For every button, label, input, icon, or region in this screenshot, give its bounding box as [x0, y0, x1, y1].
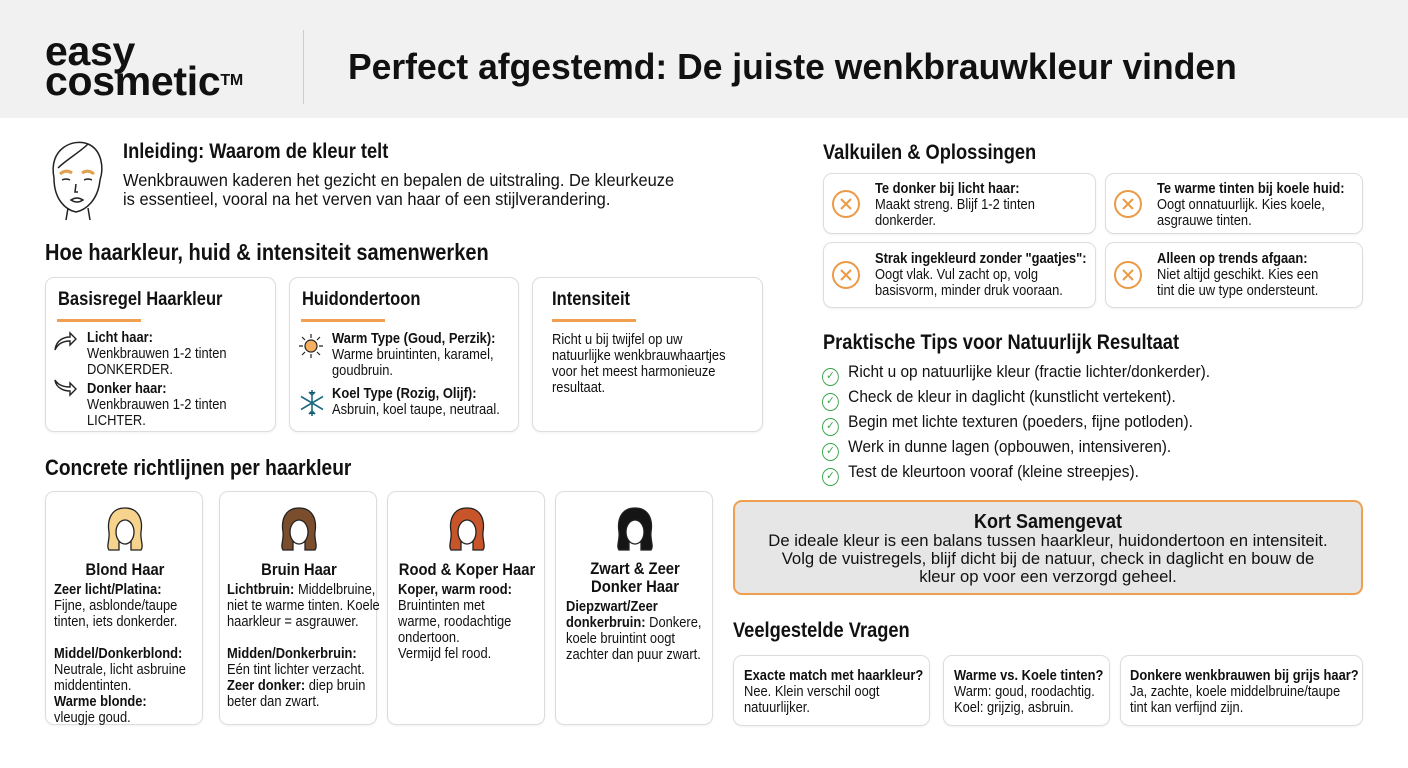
panel: basisregel: Licht haar:	[87, 329, 153, 346]
panel: basisregel: Wenkbrauwen 1-2 tinten	[87, 396, 227, 413]
panel: pitfall 2: asgrauwe tinten.	[1157, 212, 1252, 229]
panel: blond: Zeer licht/Platina:	[54, 581, 162, 598]
header band	[0, 0, 1408, 118]
tips list	[822, 363, 1210, 486]
panel: bruin: Lichtbruin: Middelbruine,	[227, 581, 375, 598]
panel: faq 2: Warm: goud, roodachtig.	[954, 683, 1095, 700]
icon: blond hair	[107, 507, 143, 551]
panel: pitfall 3: Strak ingekleurd zonder "gaatjes":	[875, 250, 1087, 267]
icon: red hair	[449, 507, 485, 551]
panel: intensiteit: resultaat.	[552, 379, 605, 396]
panel: pitfall 2: Oogt onnatuurlijk. Kies koele,	[1157, 196, 1325, 213]
panel: intensiteit	[532, 277, 763, 432]
panel: huidondertoon: Warm Type (Goud, Perzik):	[332, 330, 495, 347]
logo	[45, 28, 243, 104]
panel: rood: Bruintinten met	[398, 597, 485, 614]
panel: zwart: zachter dan puur zwart.	[566, 646, 701, 663]
icon: snowflake	[300, 390, 324, 416]
panel: pitfall 3: Oogt vlak. Vul zacht op, volg	[875, 266, 1038, 283]
panel: pitfall 1	[823, 173, 1096, 234]
panel: intensiteit: Intensiteit	[552, 289, 630, 310]
panel: faq 2: Warme vs. Koele tinten?	[954, 667, 1103, 684]
panel: blond: Fijne, asblonde/taupe	[54, 597, 177, 614]
intro text: Wenkbrauwen kaderen het gezicht en bepalen de uitstraling. De kleurkeuze	[123, 170, 674, 190]
panel: pitfall 4: tint die uw type ondersteunt.	[1157, 282, 1318, 299]
panel: huidondertoon	[289, 277, 519, 432]
tips list: ✓	[826, 395, 835, 407]
icon: x	[832, 190, 860, 218]
panel: blond: middentinten.	[54, 677, 131, 694]
tips list: Richt u op natuurlijke kleur (fractie lichter/donkerder).	[848, 363, 1210, 381]
panel: basisregel	[45, 277, 276, 432]
panel: bruin: Bruin Haar	[261, 560, 337, 579]
panel: bruin: Zeer donker: diep bruin	[227, 677, 365, 694]
panel: zwart: Zwart & Zeer	[590, 559, 680, 578]
panel: faq 1: natuurlijker.	[744, 699, 810, 716]
logo: cosmeticTM	[45, 58, 243, 104]
callout: summary: kleur op voor een verzorgd geheel.	[919, 567, 1177, 586]
heading: samenwerken: Hoe haarkleur, huid & intensiteit samenwerken	[45, 239, 489, 265]
icon: arrow up	[54, 331, 77, 350]
panel: huidondertoon: Warme bruintinten, karamel,	[332, 346, 494, 363]
panel: blond: Warme blonde:	[54, 693, 147, 710]
panel: pitfall 3	[823, 242, 1096, 308]
panel: pitfall 2: Te warme tinten bij koele huid:	[1157, 180, 1345, 197]
panel: faq 3: Donkere wenkbrauwen bij grijs haar?	[1130, 667, 1359, 684]
panel: basisregel: Donker haar:	[87, 380, 167, 397]
tips list: Begin met lichte texturen (poeders, fijne potloden).	[848, 413, 1193, 431]
panel: faq 1: Nee. Klein verschil oogt	[744, 683, 880, 700]
callout: summary: Volg de vuistregels, blijf dicht bij de natuur, check in daglicht en bouw de	[782, 549, 1314, 568]
panel: faq 3: Ja, zachte, koele middelbruine/taupe	[1130, 683, 1340, 700]
panel: rood	[387, 491, 545, 725]
intro text: is essentieel, vooral na het verven van haar of een stijlverandering.	[123, 189, 610, 209]
title: Perfect afgestemd: De juiste wenkbrauwkleur vinden	[348, 46, 1237, 87]
panel: rood: ondertoon.	[398, 629, 460, 646]
icon: sun	[299, 334, 323, 358]
panel: faq 2: Koel: grijzig, asbruin.	[954, 699, 1074, 716]
heading: faq: Veelgestelde Vragen	[733, 619, 910, 642]
panel: intensiteit: Richt u bij twijfel op uw	[552, 331, 682, 348]
panel: rood: Vermijd fel rood.	[398, 645, 491, 662]
panel: rood: Rood & Koper Haar	[399, 560, 535, 579]
panel: huidondertoon: Huidondertoon	[302, 289, 420, 310]
panel: basisregel: Wenkbrauwen 1-2 tinten	[87, 345, 227, 362]
panel: faq 3	[1120, 655, 1363, 726]
panel: blond: tinten, iets donkerder.	[54, 613, 177, 630]
heading: tips: Praktische Tips voor Natuurlijk Resultaat	[823, 331, 1179, 354]
panel: pitfall 1: donkerder.	[875, 212, 936, 229]
callout: summary: De ideale kleur is een balans tussen haarkleur, huidondertoon en intensiteit.	[768, 531, 1328, 550]
panel: bruin: beter dan zwart.	[227, 693, 320, 710]
panel: faq 3: tint kan verfijnd zijn.	[1130, 699, 1243, 716]
icon: x	[832, 261, 860, 289]
panel: zwart: koele bruintint oogt	[566, 630, 675, 647]
panel: huidondertoon: goudbruin.	[332, 362, 393, 379]
panel: pitfall 4	[1105, 242, 1363, 308]
panel: faq 1	[733, 655, 930, 726]
tips list: Werk in dunne lagen (opbouwen, intensiveren).	[848, 438, 1171, 456]
panel: bruin: haarkleur = asgrauwer.	[227, 613, 359, 630]
panel: faq 1: Exacte match met haarkleur?	[744, 667, 923, 684]
tips list: ✓	[826, 445, 835, 457]
panel: blond: Neutrale, licht asbruine	[54, 661, 186, 678]
panel: pitfall 1: Maakt streng. Blijf 1-2 tinten	[875, 196, 1035, 213]
tips list: ✓	[826, 420, 835, 432]
panel: zwart: Donker Haar	[591, 577, 679, 596]
panel: basisregel: DONKERDER.	[87, 361, 173, 378]
callout: summary: Kort Samengevat	[974, 511, 1122, 533]
tips list: ✓	[826, 470, 835, 482]
intro text	[123, 170, 674, 209]
icon: face	[52, 142, 103, 220]
icon: x	[1114, 190, 1142, 218]
panel: blond	[45, 491, 203, 725]
panel: blond: Middel/Donkerblond:	[54, 645, 182, 662]
panel: intensiteit: voor het meest harmonieuze	[552, 363, 715, 380]
panel: zwart	[555, 491, 713, 725]
panel: bruin: Eén tint lichter verzacht.	[227, 661, 365, 678]
callout: summary	[733, 500, 1363, 595]
heading: richtlijnen: Concrete richtlijnen per haarkleur	[45, 455, 351, 480]
tips list: ✓	[826, 370, 835, 382]
panel: pitfall 2	[1105, 173, 1363, 234]
icon: x	[1114, 261, 1142, 289]
panel: huidondertoon: Koel Type (Rozig, Olijf):	[332, 385, 477, 402]
panel: pitfall 3: basisvorm, minder druk vooraan.	[875, 282, 1063, 299]
panel: blond: vleugje goud.	[54, 709, 131, 726]
icon: brown hair	[281, 507, 317, 551]
tips list: Test de kleurtoon vooraf (kleine streepjes).	[848, 463, 1139, 481]
panel: zwart: Diepzwart/Zeer	[566, 598, 658, 615]
panel: blond: Blond Haar	[86, 560, 164, 579]
panel: huidondertoon: Asbruin, koel taupe, neutraal.	[332, 401, 500, 418]
panel: basisregel: LICHTER.	[87, 412, 146, 429]
panel: rood: warme, roodachtige	[398, 613, 511, 630]
logo: easy	[45, 28, 135, 74]
panel: zwart: donkerbruin: Donkere,	[566, 614, 701, 631]
tips list: Check de kleur in daglicht (kunstlicht vertekent).	[848, 388, 1176, 406]
panel: faq 2	[943, 655, 1110, 726]
icon: black hair	[617, 507, 653, 551]
panel: bruin: niet te warme tinten. Koele	[227, 597, 380, 614]
panel: pitfall 4: Alleen op trends afgaan:	[1157, 250, 1308, 267]
heading: valkuilen: Valkuilen & Oplossingen	[823, 141, 1036, 164]
panel: intensiteit: natuurlijke wenkbrauwhaartjes	[552, 347, 726, 364]
icon: arrow down	[54, 380, 77, 397]
panel: bruin: Midden/Donkerbruin:	[227, 645, 357, 662]
panel: pitfall 4: Niet altijd geschikt. Kies een	[1157, 266, 1318, 283]
intro heading: Inleiding: Waarom de kleur telt	[123, 140, 388, 163]
panel: rood: Koper, warm rood:	[398, 581, 512, 598]
panel: basisregel: Basisregel Haarkleur	[58, 289, 222, 310]
panel: pitfall 1: Te donker bij licht haar:	[875, 180, 1020, 197]
panel: bruin	[219, 491, 377, 725]
